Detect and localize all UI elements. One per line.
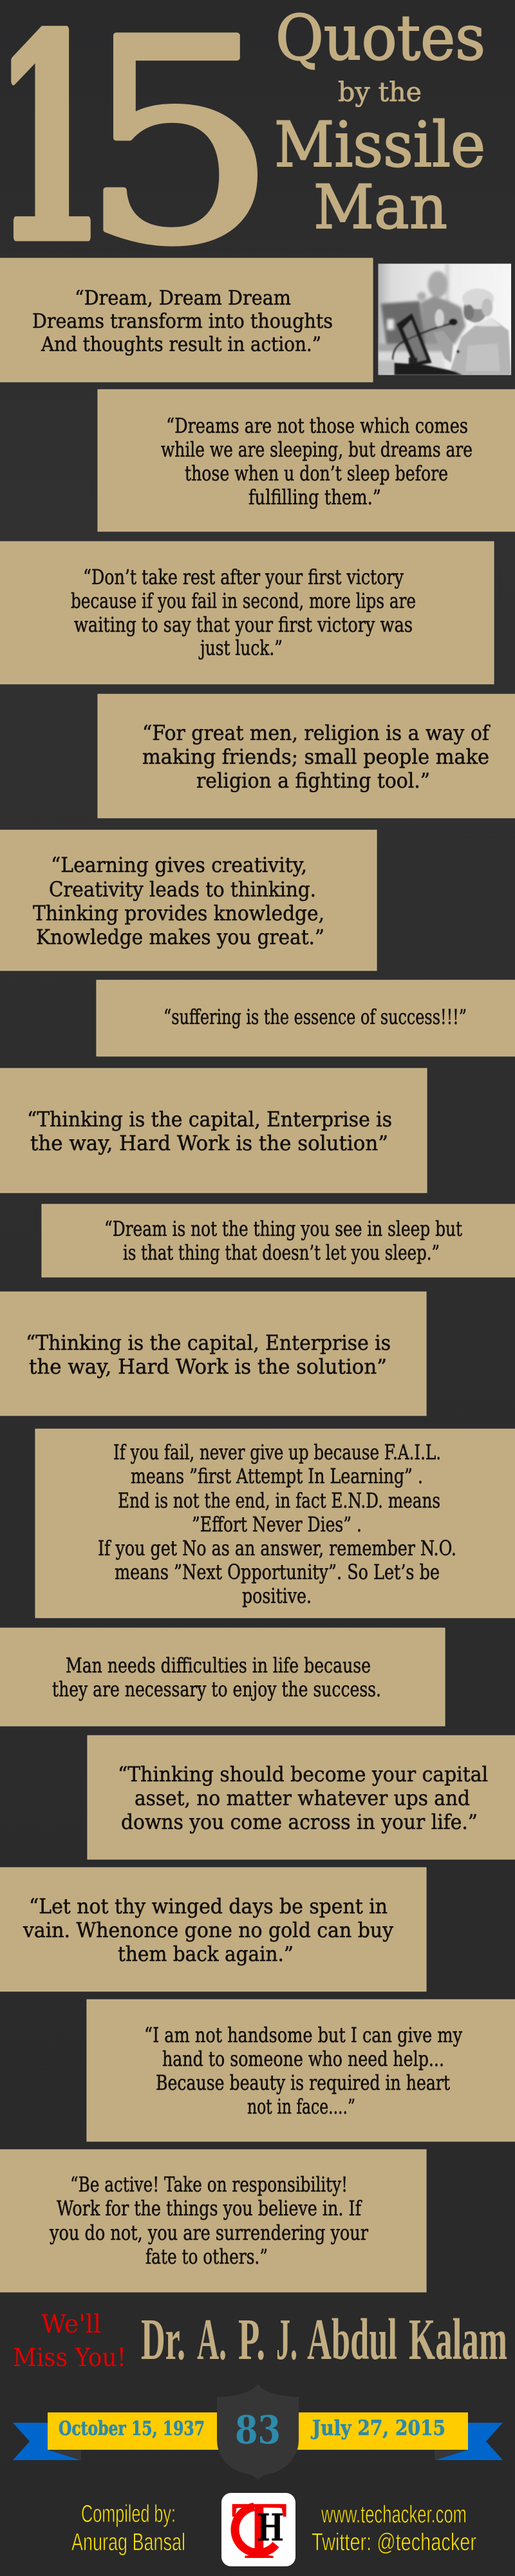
panel: quote 5 bbox=[0, 830, 377, 971]
photo: Dr. Kalam speaking at a podium bbox=[378, 263, 511, 375]
quote 4 text: religion a fighting tool.” bbox=[196, 768, 430, 793]
panel: quote 13 bbox=[0, 1868, 426, 1991]
shield badge bbox=[217, 2384, 299, 2480]
text: Dr. A. P. J. Abdul Kalam: J. bbox=[276, 2307, 297, 2372]
title: Quotes by the Missile Man: Quotes bbox=[276, 2, 485, 74]
quote 5 text: Thinking provides knowledge, bbox=[33, 901, 324, 925]
quote 1 text bbox=[32, 287, 333, 356]
title: Quotes by the Missile Man: Man bbox=[314, 173, 447, 243]
text: Compiled by Anurag Bansal: Compiled by: bbox=[81, 2501, 176, 2528]
icon: Techacker logo: H bbox=[257, 2506, 284, 2550]
quote 12 text: asset, no matter whatever ups and bbox=[135, 1786, 470, 1810]
panel: quote 14 bbox=[87, 2000, 515, 2141]
quote 9 text: the way, Hard Work is the solution” bbox=[29, 1354, 387, 1379]
panel: quote 6 bbox=[97, 980, 515, 1056]
age 83: 83 bbox=[235, 2408, 281, 2453]
quote 1 text: Dreams transform into thoughts bbox=[32, 310, 333, 333]
quote 9 text: “Thinking is the capital, Enterprise is bbox=[26, 1331, 391, 1355]
icon: Techacker logo: T bbox=[230, 2485, 288, 2576]
panel: quote 11 bbox=[0, 1628, 445, 1726]
text: website and twitter bbox=[312, 2501, 476, 2556]
quote 12 text: downs you come across in your life.” bbox=[121, 1810, 478, 1834]
quote 13 text bbox=[23, 1894, 393, 1966]
birth date: October 15, 1937 bbox=[59, 2418, 205, 2440]
panel: quote 9 bbox=[0, 1292, 426, 1416]
quote 3 text: waiting to say that your first victory was bbox=[74, 612, 413, 637]
panel: quote 8 bbox=[42, 1204, 515, 1277]
quote 15 text: “Be active! Take on responsibility! bbox=[70, 2172, 348, 2197]
panel: quote 7 bbox=[0, 1068, 427, 1193]
text: Compiled by Anurag Bansal bbox=[71, 2501, 185, 2556]
quote 3 text bbox=[71, 565, 416, 660]
panel: quote 15 bbox=[0, 2150, 426, 2292]
quote 10 text: means ”Next Opportunity”. So Let’s be bbox=[115, 1560, 440, 1584]
quote 12 text: “Thinking should become your capital bbox=[118, 1762, 488, 1786]
quote 14 text bbox=[144, 2023, 462, 2119]
quote 10 text: means ”first Attempt In Learning” . bbox=[131, 1464, 423, 1488]
text: Dr. A. P. J. Abdul Kalam: Abdul bbox=[307, 2307, 397, 2372]
quote 9 text bbox=[26, 1331, 391, 1379]
quote 5 text bbox=[33, 853, 324, 949]
quote 10 text: ”Effort Never Dies” . bbox=[192, 1512, 362, 1537]
quote 4 text: “For great men, religion is a way of bbox=[142, 721, 491, 745]
panel: quote 2 bbox=[98, 390, 515, 531]
quote 15 text: fate to others.” bbox=[145, 2244, 268, 2269]
text: We'll Miss You!: Miss You! bbox=[13, 2344, 126, 2372]
quote 7 text: the way, Hard Work is the solution” bbox=[30, 1131, 388, 1155]
quote 2 text bbox=[161, 413, 473, 509]
text: Dr. A. P. J. Abdul Kalam: P. bbox=[238, 2307, 265, 2372]
title: Quotes by the Missile Man bbox=[274, 2, 485, 243]
quote 10 text bbox=[98, 1440, 456, 1608]
quote 11 text: they are necessary to enjoy the success. bbox=[52, 1677, 381, 1701]
quote 14 text: not in face....” bbox=[247, 2094, 355, 2119]
quote 7 text: “Thinking is the capital, Enterprise is bbox=[27, 1107, 392, 1132]
quote 11 text bbox=[52, 1653, 381, 1701]
quote 4 text: making friends; small people make bbox=[142, 744, 489, 769]
panel: quote 4 bbox=[98, 694, 515, 818]
quote 15 text bbox=[49, 2172, 369, 2269]
quote 5 text: Knowledge makes you great.” bbox=[36, 925, 324, 949]
panel: quote 12 bbox=[88, 1736, 515, 1859]
quote 5 text: Creativity leads to thinking. bbox=[49, 877, 316, 902]
text: We'll Miss You!: We'll bbox=[41, 2310, 101, 2339]
quote 15 text: you do not, you are surrendering your bbox=[49, 2221, 369, 2245]
panel: quote 1 bbox=[0, 258, 373, 382]
quote 13 text: “Let not thy winged days be spent in bbox=[29, 1894, 388, 1918]
text: Dr. A. P. J. Abdul Kalam: Dr. bbox=[141, 2307, 185, 2372]
quote 8 text bbox=[104, 1217, 462, 1265]
quote 14 text: hand to someone who need help... bbox=[162, 2047, 444, 2071]
text: Dr. A. P. J. Abdul Kalam bbox=[141, 2307, 507, 2372]
text: Compiled by Anurag Bansal: Anurag Bansal bbox=[71, 2529, 185, 2556]
text: We'll Miss You! bbox=[13, 2310, 126, 2372]
quote 1 text: And thoughts result in action.” bbox=[41, 334, 321, 356]
quote 4 text bbox=[142, 721, 491, 793]
quote 5 text: “Learning gives creativity, bbox=[51, 853, 307, 877]
panel: quote 10 bbox=[35, 1429, 515, 1618]
title: Quotes by the Missile Man: Missile bbox=[274, 109, 485, 181]
quote 3 text: because if you fail in second, more lips are bbox=[71, 589, 416, 613]
title: Quotes by the Missile Man: by the bbox=[338, 77, 422, 108]
quote 11 text: Man needs difficulties in life because bbox=[66, 1653, 371, 1678]
text: Dr. A. P. J. Abdul Kalam: A. bbox=[197, 2307, 227, 2372]
death date: July 27, 2015 bbox=[310, 2416, 445, 2440]
quote 10 text: positive. bbox=[242, 1584, 312, 1608]
quote 1 text: “Dream, Dream Dream bbox=[75, 287, 291, 310]
quote 13 text: vain. Whenonce gone no gold can buy bbox=[23, 1918, 393, 1942]
quote 12 text bbox=[118, 1762, 488, 1834]
panel: quote 3 bbox=[0, 542, 494, 684]
quote 2 text: fulfilling them.” bbox=[248, 485, 381, 509]
quote 15 text: Work for the things you believe in. If bbox=[57, 2196, 362, 2221]
ribbon banner with dates bbox=[13, 2384, 503, 2480]
quote 2 text: those when u don’t sleep before bbox=[185, 461, 448, 486]
quote 3 text: just luck.” bbox=[198, 636, 283, 660]
quote 7 text bbox=[27, 1107, 392, 1155]
quote 13 text: them back again.” bbox=[118, 1942, 294, 1966]
icon: Techacker logo bbox=[221, 2485, 295, 2576]
quote 3 text: “Don’t take rest after your first victory bbox=[83, 565, 404, 589]
